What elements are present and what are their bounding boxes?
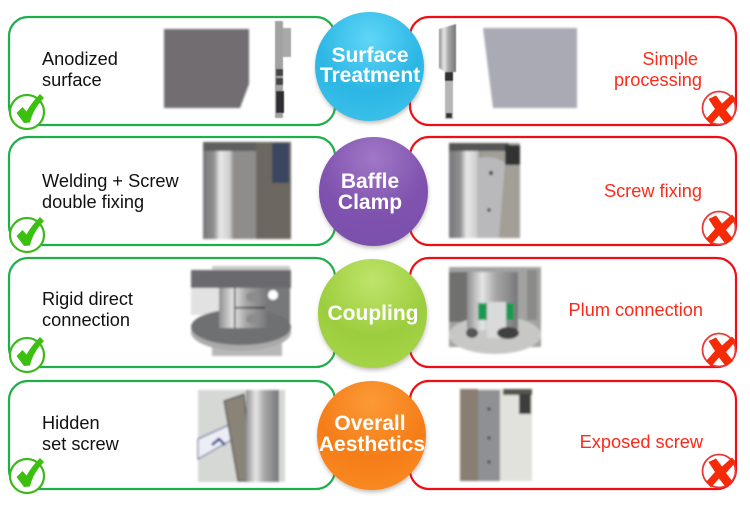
badge: baffle clamp <box>319 137 428 248</box>
text: welding and screw: Welding + Screw <box>42 171 180 191</box>
badge: coupling: Coupling <box>328 302 418 325</box>
badge: baffle clamp: Clamp <box>338 191 402 214</box>
photo: anodized module <box>275 21 291 118</box>
icon: check mark <box>10 217 44 252</box>
panel: baffle clamp fail <box>410 137 736 245</box>
photo: welded baffle <box>203 142 291 239</box>
photo: hidden screw <box>198 390 285 482</box>
panel: coupling fail <box>410 258 736 367</box>
photo: plain module <box>439 24 456 119</box>
photo: plain plate <box>483 28 577 108</box>
photo: rigid coupling <box>191 266 291 356</box>
panel: surface treatment fail <box>410 17 736 125</box>
panel: coupling pass <box>9 258 335 372</box>
photo: anodized plate <box>164 29 249 108</box>
photo: screwed baffle <box>449 143 520 238</box>
photo: plum coupling <box>449 267 541 354</box>
text: rigid direct connection: connection <box>42 310 130 330</box>
badge: surface treatment: Treatment <box>320 64 420 87</box>
photo: exposed screw <box>460 389 532 481</box>
text: hidden set screw: Hidden <box>42 413 100 433</box>
icon: check mark <box>10 458 44 493</box>
text: hidden set screw: set screw <box>42 434 120 454</box>
panel: aesthetics pass <box>9 381 335 493</box>
text: plum connection: Plum connection <box>569 300 703 320</box>
text: simple processing: Simple <box>642 49 698 69</box>
badge: surface treatment: Surface <box>331 44 409 67</box>
badge: overall aesthetics: Aesthetics <box>319 433 425 456</box>
badge: baffle clamp: Baffle <box>341 170 399 193</box>
icon: cross mark <box>702 92 736 124</box>
text: simple processing: processing <box>614 70 702 90</box>
panel: baffle clamp pass <box>9 137 335 252</box>
text: anodized surface: surface <box>42 70 102 90</box>
text: exposed screw: Exposed screw <box>580 432 704 452</box>
text: screw fixing: Screw fixing <box>604 181 702 201</box>
icon: cross mark <box>702 454 736 488</box>
panel: surface treatment pass <box>9 17 335 129</box>
text: welding and screw: double fixing <box>42 192 144 212</box>
icon: check mark <box>10 337 44 372</box>
badge: overall aesthetics <box>317 381 426 492</box>
icon: cross mark <box>702 334 736 366</box>
text: anodized surface: Anodized <box>42 49 118 69</box>
icon: cross mark <box>702 212 736 244</box>
badge: overall aesthetics: Overall <box>334 412 406 435</box>
badge: surface treatment <box>315 12 424 123</box>
icon: check mark <box>10 94 44 129</box>
panel: aesthetics fail <box>410 381 736 489</box>
badge: coupling <box>318 259 427 370</box>
text: rigid direct connection: Rigid direct <box>42 289 133 309</box>
